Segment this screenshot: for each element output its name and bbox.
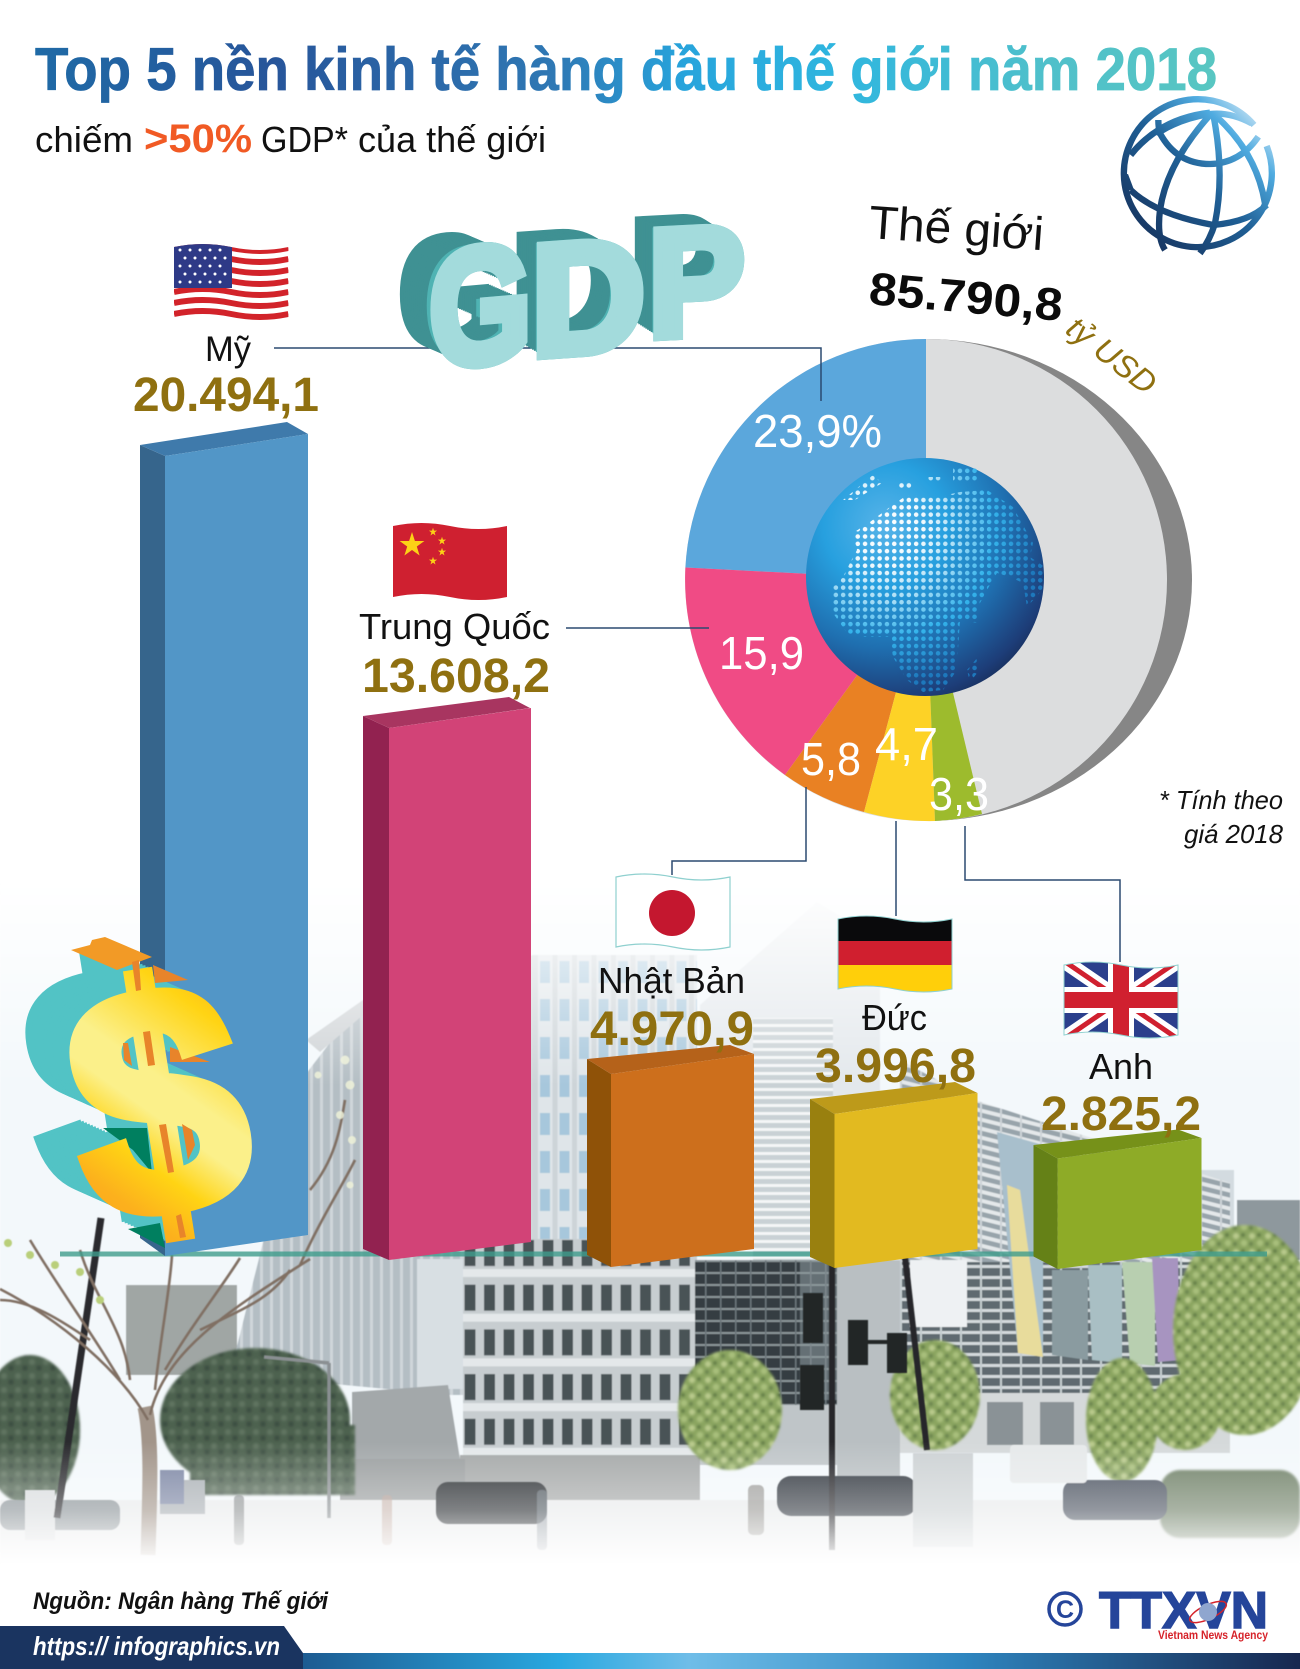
flag: China [393,523,507,600]
flag: USA [174,240,288,321]
pie value labels: 23,9% [753,405,882,457]
icon: 3D dollar sign: $ [28,904,251,1284]
icon: 3D dollar sign: $ [10,896,233,1276]
subtitle: GDP* [261,119,348,160]
bar: Nhật Bản [587,1045,754,1267]
icon: 3D dollar sign: $ [31,905,254,1285]
icon: 3D dollar sign: $ [46,912,269,1292]
pie depth crescent [926,339,1192,821]
value: Mỹ: 20.494,1 [133,369,319,422]
footnote [1159,785,1284,849]
background photo: World Bank building [0,942,1300,1555]
footnote: * Tính theo [1159,785,1283,815]
icon: 3D dollar sign: $ [4,893,227,1273]
value: Anh: 2.825,2 [1041,1088,1201,1141]
label: Trung Quốc: Trung Quốc [359,606,550,647]
label: Đức: Đức [862,997,927,1038]
icon: 3D dollar sign: $ [34,907,257,1286]
slice: Anh [926,580,982,821]
pie value labels: 15,9 [719,627,804,679]
icon: globe [806,458,1044,696]
subtitle: chiếm [35,119,133,160]
panel: world GDP pie chart [274,339,1192,962]
footer url: https:// infographics.vn [33,1631,280,1661]
icon: 3D GDP lettering: D [531,205,645,390]
icon: 3D dollar sign: $ [37,908,260,1288]
icon: 3D dollar sign: $ [25,903,248,1282]
logo: TTXVN: C [1056,1596,1074,1624]
footnote: giá 2018 [1184,819,1284,849]
subtitle: >50% [144,117,252,161]
value: Trung Quốc: 13.608,2 [362,650,550,703]
subtitle: của thế giới [358,119,546,160]
pie value labels: 4,7 [875,718,938,770]
title: Top 5 nền kinh tế hàng đầu thế giới năm 2018 [35,36,1217,103]
icon: 3D GDP lettering: P [648,193,745,370]
slice: Mỹ [685,339,926,580]
source: Nguồn: Ngân hàng Thế giới [33,1588,329,1615]
icon: 3D GDP lettering: G [429,209,532,402]
baseline of bar chart [60,1252,1267,1256]
label: Anh: Anh [1089,1046,1153,1087]
icon: 3D GDP lettering [400,193,745,402]
panel: bar chart [140,422,1202,1269]
connector lines from pie [274,348,1120,962]
slice: Nhật Bản [785,580,926,812]
icon: World Bank globe logo [1124,99,1272,253]
value: Đức: 3.996,8 [815,1040,976,1093]
icon: 3D dollar sign: $ [16,899,239,1278]
logo: TTXVN: Vietnam News Agency [1158,1628,1268,1642]
icon: 3D dollar sign: $ [7,895,230,1274]
bar: Anh [1034,1130,1202,1269]
icon: 3D GDP lettering: P [648,193,745,370]
logo: TTXVN: TTXVN [1099,1582,1268,1640]
bar: Đức [810,1082,978,1268]
value: Nhật Bản: 4.970,9 [590,1003,754,1056]
label: Mỹ: Mỹ [205,330,251,369]
bar: Trung Quốc [363,697,531,1260]
heading: Thế giới: Thế giới [867,195,1046,260]
label: Nhật Bản: Nhật Bản [598,960,745,1001]
pie value labels [719,405,989,820]
flag: Germany [838,912,952,997]
icon: 3D GDP lettering: D [531,205,645,390]
world total value: 85.790,8 [867,262,1065,331]
slice: Trung Quốc [685,568,926,775]
icon: 3D dollar sign: $ [43,911,266,1290]
slice: Đức [864,580,935,821]
subtitle [35,117,546,161]
flag: UK [1064,962,1178,1038]
icon: 3D dollar sign: $ [22,901,245,1281]
icon: 3D dollar sign: $ [1,892,224,1272]
pie value labels: 3,3 [929,768,989,820]
bar: Mỹ [140,422,308,1256]
icon: 3D GDP lettering: G [429,209,532,402]
slice: rest of world [685,339,1167,821]
flag: Japan [616,874,730,950]
icon: 3D dollar sign: $ [19,900,242,1280]
unit: tỷ USD: tỷ USD [1060,309,1164,402]
pie value labels: 5,8 [801,733,861,785]
footer band [0,1626,1300,1669]
icon: 3D dollar sign: $ [40,909,263,1289]
icon: 3D dollar sign: $ [13,897,236,1277]
